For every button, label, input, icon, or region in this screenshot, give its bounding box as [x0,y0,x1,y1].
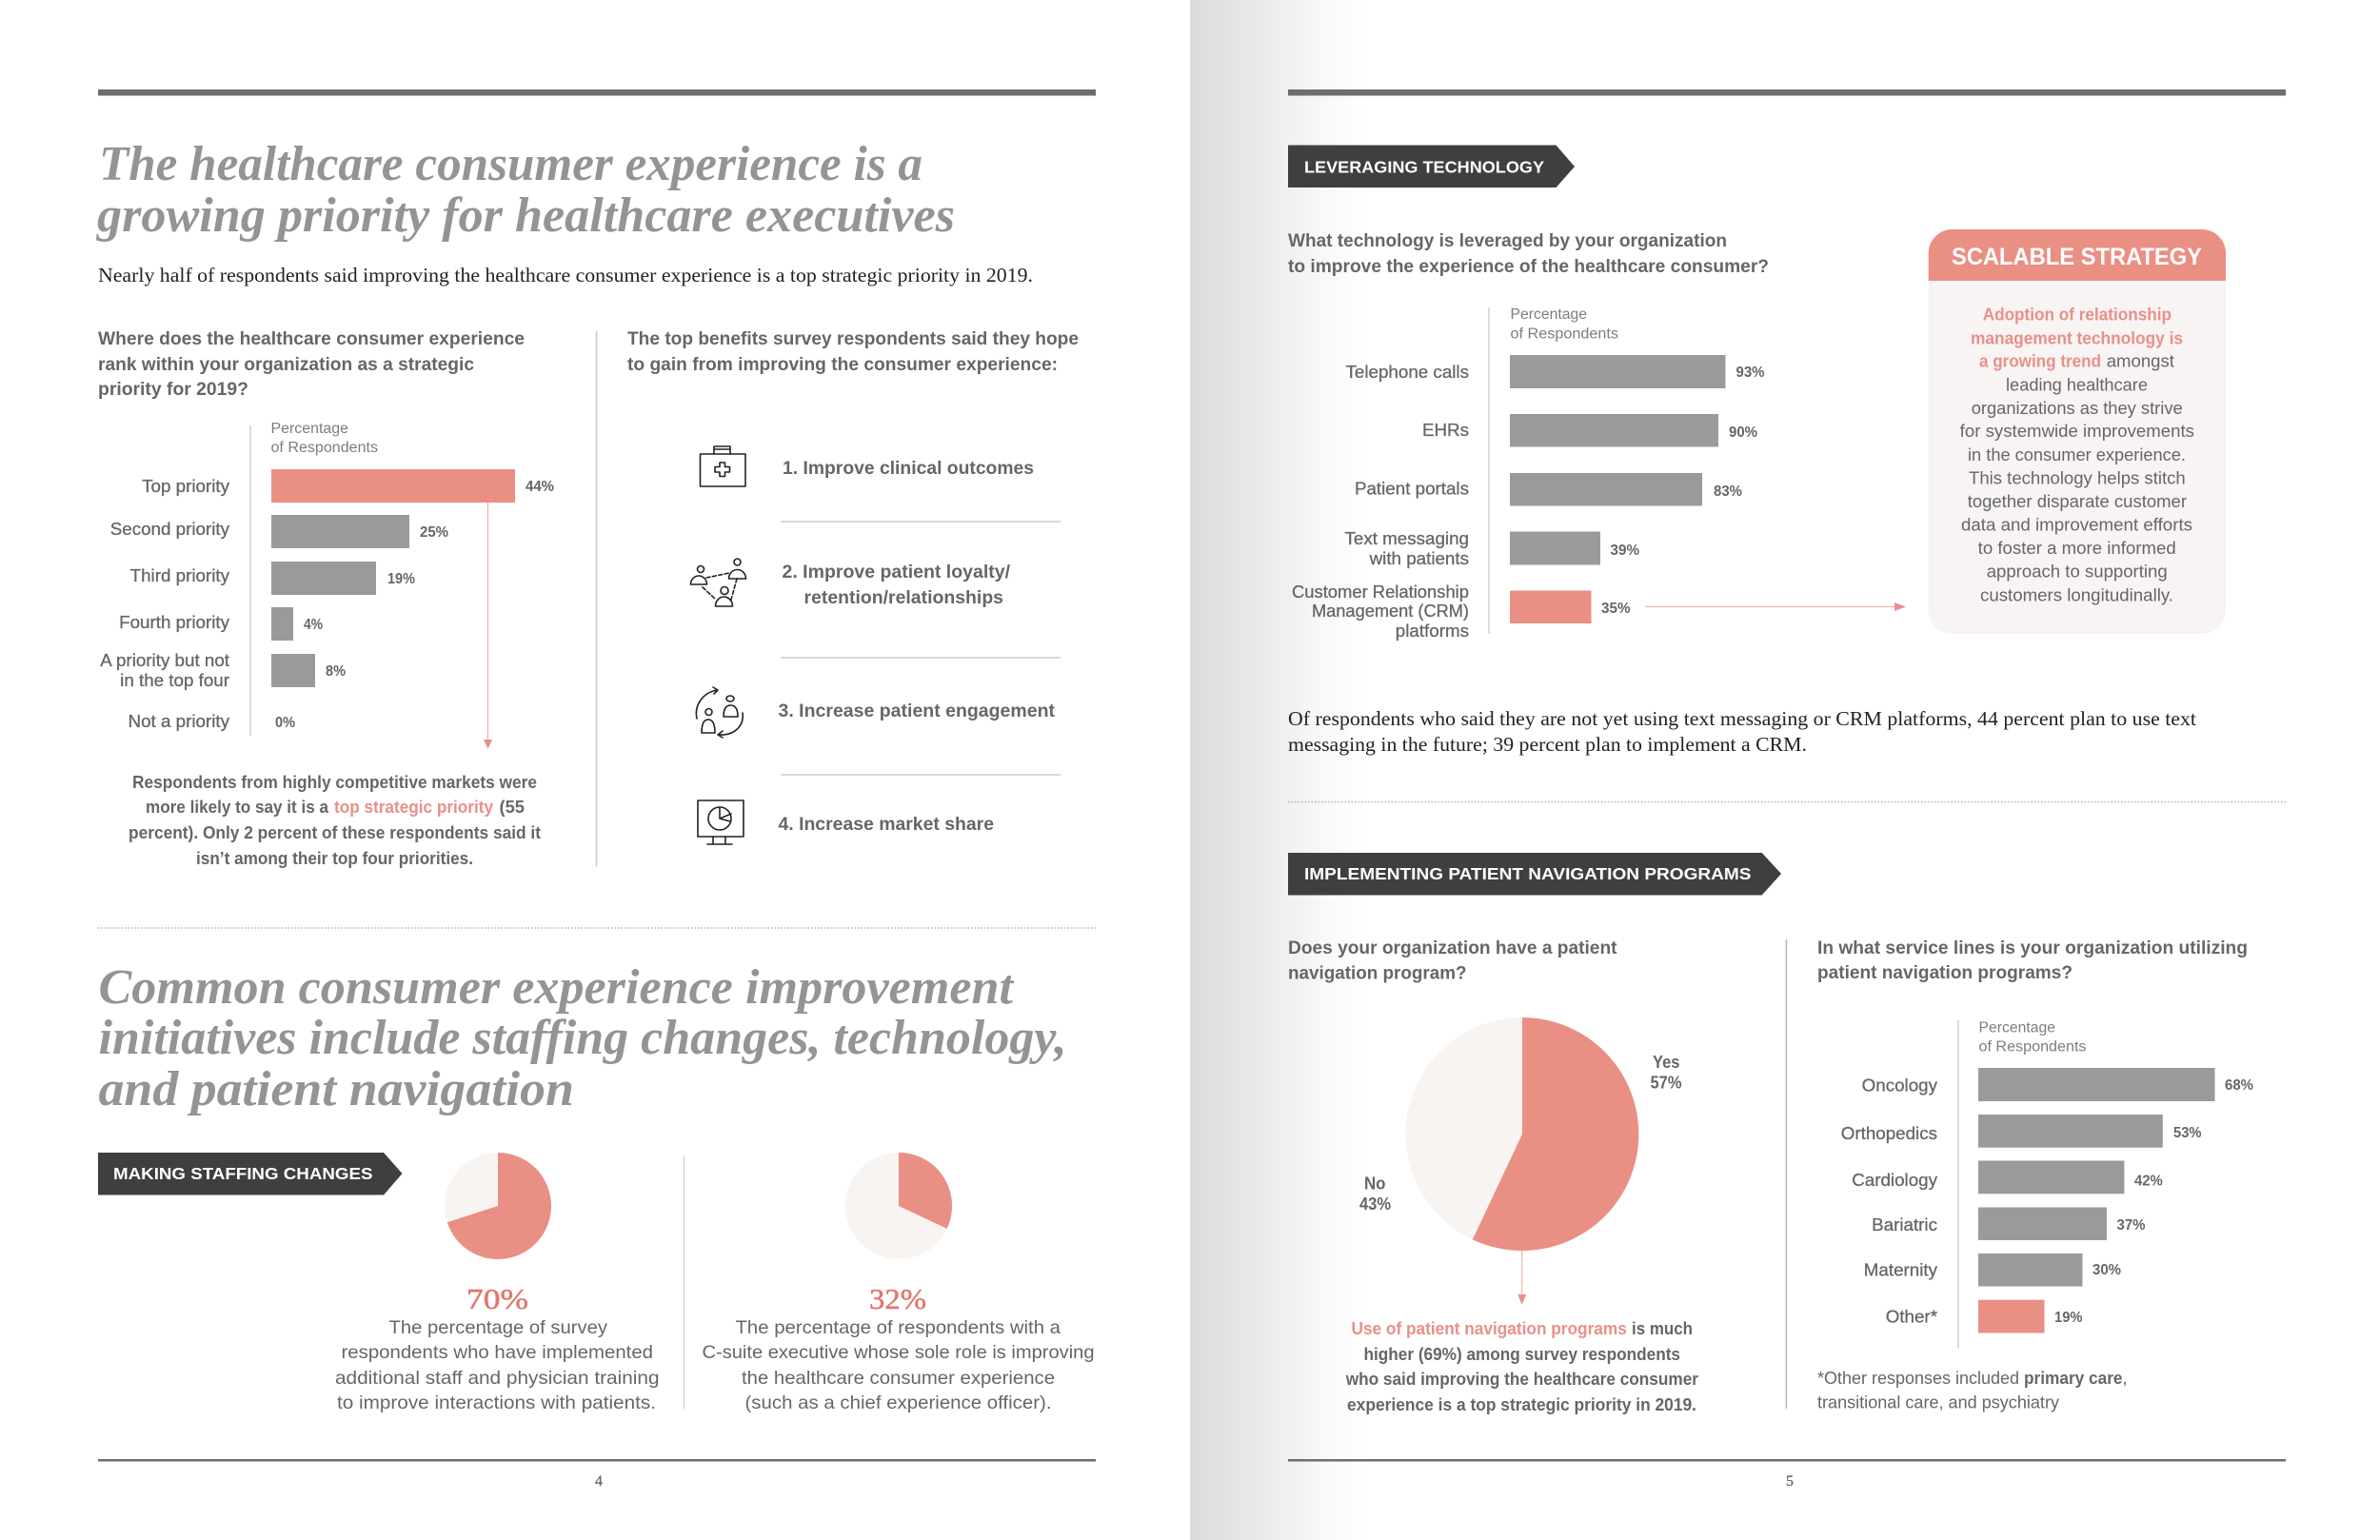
title: common initiatives: and patient navigation [99,1062,574,1116]
panel body text: This technology helps stitch [1969,468,2186,488]
bar: top priority: Top priority [142,476,230,496]
bar: text messaging: Text messaging [1344,528,1469,548]
bar: priority not in top four: in the top four [120,670,229,690]
callout: competitive markets [129,772,541,868]
callout: use of navigation programs: Use of patient navigation programs [1352,1318,1627,1338]
panel body text: Adoption of relationship [1983,305,2172,325]
bar: CRM platforms: Management (CRM) [1312,601,1469,621]
stat description: The percentage of survey [388,1317,607,1338]
callout: use of navigation programs [1345,1318,1698,1414]
panel header [1929,229,2226,281]
bar: EHRs [1422,414,1757,447]
bar: not a priority: Not a priority [129,711,230,731]
label: yes: Yes [1653,1052,1679,1072]
title: growing priority: The healthcare consumer experience is a [99,137,922,191]
question: navigation program: Does your organization have a patient [1288,938,1617,958]
axis caption: Percentage [270,421,348,437]
heading: top benefits: to gain from improving the consumer experience: [627,354,1058,375]
intro sentence: Nearly half of respondents said improving the healthcare consumer experience is a top strategic priority in 2019. [98,264,1033,286]
bar: second priority: Second priority [110,519,230,539]
callout: use of navigation programs: experience is a top strategic priority in 2019. [1347,1394,1696,1414]
stat description [335,1317,659,1413]
bar: telephone calls: Telephone calls [1346,362,1469,382]
tag: making staffing changes [98,1153,402,1195]
bar: fourth priority: 4% [304,617,323,633]
benefit 2: 2. Improve patient loyalty/ [783,562,1011,582]
icon: monitor with pie [698,800,744,844]
icon: connected people [691,559,746,606]
page number 5: 5 [1786,1473,1794,1490]
callout: competitive markets: (55 [499,797,525,817]
bar: patient portals [1355,473,1742,506]
benefit 3: 3. Increase patient engagement [779,701,1056,721]
axis caption [1510,306,1618,343]
arrow: yes to callout [1517,1251,1526,1305]
pie: navigation program yes or no [1359,1017,1681,1251]
benefit 1: 1. Improve clinical outcomes [783,458,1034,479]
benefit 4 [698,800,994,844]
bar: telephone calls [1346,355,1765,388]
question: navigation program: navigation program? [1288,963,1466,984]
benefit 2 [691,559,1011,608]
bar: third priority [130,562,415,595]
footnote: other responses: primary care [2024,1369,2123,1388]
axis caption: Percentage [1978,1020,2055,1036]
bar: orthopedics [1841,1115,2202,1148]
title: growing priority: growing priority for healthcare executives [96,188,955,243]
left page [96,89,1097,1490]
heading: top benefits: The top benefits survey respondents said they hope [627,328,1079,349]
axis caption: of Respondents [1978,1039,2087,1055]
bar: cardiology [1852,1161,2163,1194]
bar: patient portals: 83% [1714,484,1742,500]
stat: 32 percent [703,1282,1095,1413]
arrow: top priority to callout [484,503,492,749]
bar: bariatric: Bariatric [1872,1214,1937,1234]
right page [1288,89,2286,1490]
question: strategic rank [98,328,525,400]
footnote: other responses [1817,1369,2128,1412]
axis caption: of Respondents [270,440,378,456]
tag: implementing patient navigation programs: IMPLEMENTING PATIENT NAVIGATION PROGRAMS [1304,864,1752,883]
bar: cardiology: Cardiology [1852,1170,1938,1190]
callout: use of navigation programs: is much [1632,1318,1693,1338]
stat description: additional staff and physician training [335,1368,659,1389]
arrow: CRM to scalable strategy [1645,602,1906,611]
panel body text: customers longitudinally. [1980,585,2173,605]
callout: competitive markets: percent). Only 2 percent of these respondents said it [129,822,541,842]
benefit 2: retention/relationships [803,587,1003,608]
note: text messaging and CRM plans: Of respondents who said they are not yet using text messaging or CRM platforms, 44 percent plan to use text [1288,707,2196,730]
bar: CRM platforms [1292,582,1631,641]
note: text messaging and CRM plans [1288,707,2196,756]
stat description: respondents who have implemented [341,1342,653,1363]
label: no: No [1364,1173,1386,1194]
panel body text: a growing trend [1979,351,2101,371]
tag: implementing patient navigation programs [1288,853,1781,895]
stat description: (such as a chief experience officer). [744,1392,1051,1413]
callout: competitive markets: top strategic priority [334,797,494,817]
question: service lines: In what service lines is your organization utilizing [1817,938,2248,958]
question: service lines: patient navigation programs? [1817,962,2073,983]
stat description [703,1317,1095,1413]
panel: scalable strategy [1929,229,2226,634]
bar: patient portals: Patient portals [1355,478,1469,499]
bar: third priority: 19% [387,571,415,587]
callout: competitive markets: isn’t among their top four priorities. [196,848,473,868]
bar: text messaging [1344,528,1639,568]
bar: oncology: Oncology [1862,1076,1938,1095]
axis caption: of Respondents [1510,326,1618,343]
bar: second priority [110,515,448,548]
page number 4: 4 [595,1473,603,1490]
title: common initiatives: initiatives include staffing changes, technology, [99,1011,1066,1065]
bar: third priority: Third priority [130,565,230,585]
label: no [1359,1173,1391,1214]
stat description: The percentage of respondents with a [735,1317,1061,1338]
bar: telephone calls: 93% [1736,365,1765,381]
bar: orthopedics: 53% [2173,1125,2202,1141]
bar: orthopedics: Orthopedics [1841,1123,1937,1143]
pie: 70 percent staffing [445,1153,551,1259]
bar: fourth priority [119,607,323,641]
tag: leveraging technology: LEVERAGING TECHNOLOGY [1304,158,1544,177]
question: strategic rank: priority for 2019? [98,379,248,400]
callout: competitive markets: more likely to say it is a [146,797,329,817]
callout: competitive markets: Respondents from highly competitive markets were [132,772,537,792]
callout: use of navigation programs: higher (69%) among survey respondents [1363,1344,1680,1364]
bar: not a priority: 0% [275,715,295,731]
icon: medical kit [701,446,745,486]
bar: EHRs: EHRs [1422,420,1469,440]
stat: 70 percent [335,1282,659,1413]
tag: making staffing changes: MAKING STAFFING CHANGES [113,1164,373,1183]
bar: maternity: Maternity [1864,1260,1938,1279]
stat description: C-suite executive whose sole role is improving [703,1342,1095,1363]
panel body text: amongst [2107,351,2174,371]
panel body text: for systemwide improvements [1960,421,2194,441]
benefit 3 [696,687,1056,738]
bar: bariatric: 37% [2117,1217,2146,1234]
bar chart: service lines [1841,1020,2253,1348]
title: growing priority [96,137,955,243]
bar: bariatric [1872,1207,2146,1240]
bar: fourth priority: Fourth priority [119,612,230,632]
bar: EHRs: 90% [1729,424,1757,441]
panel body text: data and improvement efforts [1961,515,2192,535]
bar: other [1886,1300,2083,1333]
panel body text: to foster a more informed [1978,538,2176,558]
stat description: to improve interactions with patients. [337,1392,656,1413]
question: navigation program [1288,938,1617,984]
label: yes: 57% [1651,1072,1681,1093]
bar chart: strategic priority rank [100,421,554,736]
title: common initiatives: Common consumer experience improvement [99,960,1015,1015]
bar: oncology [1862,1068,2253,1101]
bar: priority not in top four: A priority but not [100,650,230,670]
bar chart: technology [1292,306,1765,641]
bar: CRM platforms: platforms [1396,621,1469,641]
panel body text: approach to supporting [1987,562,2168,582]
benefit 4: 4. Increase market share [779,814,994,835]
question: technology [1288,230,1769,277]
question: technology: to improve the experience of the healthcare consumer? [1288,256,1769,277]
footnote: other responses: transitional care, and psychiatry [1817,1393,2059,1412]
panel body text: together disparate customer [1968,491,2187,511]
stat description: the healthcare consumer experience [742,1368,1055,1389]
bar: other: Other* [1886,1306,1938,1327]
panel body text: leading healthcare [2006,375,2148,395]
bar: second priority: 25% [420,524,448,541]
panel header: SCALABLE STRATEGY [1952,244,2202,270]
bar: CRM platforms: Customer Relationship [1292,582,1469,602]
bar: CRM platforms: 35% [1601,601,1631,617]
bar: cardiology: 42% [2134,1173,2163,1190]
label: no: 43% [1359,1194,1391,1214]
question: technology: What technology is leveraged by your organization [1288,230,1727,251]
icon: engagement cycle [696,687,743,738]
page spine shadow [1190,0,1366,1540]
footnote: other responses: *Other responses included [1817,1369,2019,1388]
bar: maternity [1864,1254,2121,1287]
bar: top priority [142,469,554,503]
question: strategic rank: Where does the healthcare consumer experience [98,328,525,349]
axis caption [270,421,378,456]
bar: oncology: 68% [2225,1077,2253,1094]
axis caption: Percentage [1510,306,1587,323]
footnote: other responses: , [2123,1369,2128,1388]
title: common initiatives [99,960,1066,1116]
panel body text: organizations as they strive [1972,398,2183,418]
label: yes [1651,1052,1681,1093]
bar: other: 19% [2054,1310,2083,1326]
bar: not a priority [129,711,295,731]
tag: leveraging technology [1288,145,1575,188]
bar: text messaging: 39% [1611,543,1639,559]
panel body text: in the consumer experience. [1968,444,2186,464]
question: service lines [1817,938,2248,983]
heading: top benefits [627,328,1079,375]
bar: priority not in top four [100,650,346,690]
stat: 32 percent: 32% [869,1282,926,1315]
panel body text: management technology is [1971,328,2183,348]
bar: text messaging: with patients [1369,548,1469,568]
benefit 1 [701,446,1034,486]
panel body text [1960,305,2194,605]
axis caption [1978,1020,2087,1055]
question: strategic rank: rank within your organization as a strategic [98,354,474,375]
bar: priority not in top four: 8% [326,663,346,680]
note: text messaging and CRM plans: messaging in the future; 39 percent plan to implement a CRM. [1288,733,1807,756]
callout: use of navigation programs: who said improving the healthcare consumer [1345,1369,1698,1389]
bar: top priority: 44% [526,479,554,495]
pie: 32 percent c-suite [845,1153,952,1259]
bar: maternity: 30% [2092,1262,2121,1278]
stat: 70 percent: 70% [466,1282,528,1315]
